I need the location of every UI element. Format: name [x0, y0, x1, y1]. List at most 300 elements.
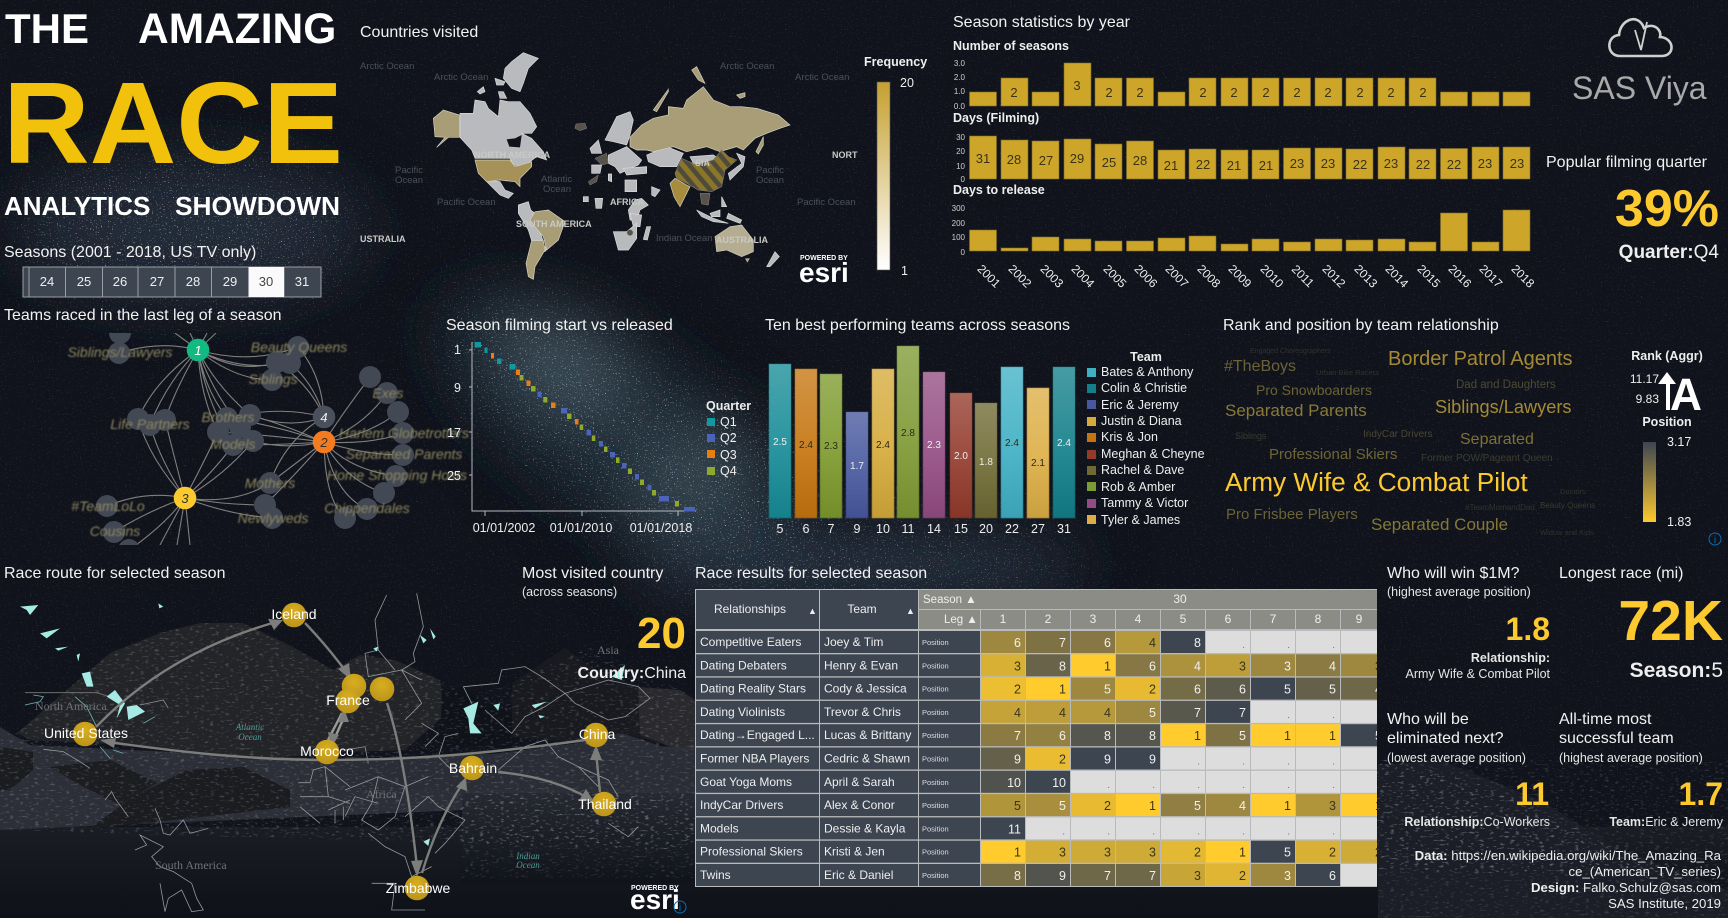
chart: days filming: 23 [1384, 156, 1398, 171]
legend: team: Bates & Anthony [1101, 365, 1194, 379]
world map: AFRICA [610, 197, 644, 207]
word cloud: relationships: Beauty Queens [1540, 501, 1595, 510]
row: Competitive Eaters: Competitive Eaters [700, 635, 801, 649]
network graph: 1 [194, 343, 202, 358]
world map: Atlantic [541, 174, 572, 185]
row: Goat Yoga Moms: . [1287, 780, 1290, 791]
row: Dating Engaged: Lucas & Brittany [824, 728, 911, 742]
chart: number of seasons: 2 [1293, 85, 1301, 100]
chart: number of seasons: 2 [1324, 85, 1332, 100]
row: Professional Skiers: Position [922, 848, 949, 857]
chart: number of seasons: 2 [1105, 85, 1113, 100]
legend: team: Rachel & Dave [1101, 463, 1184, 477]
chart: days to release: 2005 [1100, 262, 1129, 291]
table header: ▲ [906, 606, 915, 616]
icon: info: i [1714, 535, 1716, 546]
route map: Iceland [271, 606, 317, 622]
row: Competitive Eaters: . [1332, 640, 1335, 651]
row: Twins: Position [922, 871, 949, 880]
chart: days to release: 2007 [1162, 262, 1191, 291]
bar chart: ten best teams: 2.1 [1031, 458, 1045, 469]
chart: number of seasons: 2 [1230, 85, 1238, 100]
kpi: who will be eliminated: eliminated next? [1387, 730, 1504, 747]
row: Dating Engaged: 7 [1014, 729, 1021, 743]
row: Dating Violinists [696, 701, 1385, 723]
legend: frequency: 20 [900, 76, 914, 90]
route map: Zimbabwe [386, 880, 450, 896]
table header: Season ▲ [923, 594, 977, 606]
chart: days to release: 2016 [1445, 262, 1474, 291]
row: Dating Reality Stars: 6 [1194, 683, 1201, 697]
route map: Atlantic [235, 722, 264, 732]
legend: team: Colin & Christie [1101, 381, 1187, 395]
chart: days to release: 2009 [1225, 262, 1254, 291]
world map: Indian Ocean [656, 233, 713, 244]
row: Former NBA Players: 9 [1104, 752, 1111, 766]
legend: rank size: 9.83 [1636, 392, 1659, 406]
kpi: longest race: Longest race (mi) [1559, 565, 1684, 582]
word cloud: relationships: Doctors [1560, 487, 1586, 496]
row: Dating Reality Stars: 2 [1014, 683, 1021, 697]
word cloud: relationships: Pro Frisbee Players [1226, 506, 1358, 523]
row: Goat Yoga Moms: 10 [1052, 776, 1066, 790]
row: Professional Skiers: 3 [1059, 846, 1066, 860]
route map: Morocco [300, 743, 354, 759]
scatter: filming start vs released: 9 [454, 381, 461, 395]
world map: SIA [695, 158, 711, 168]
row: Former NBA Players: . [1287, 756, 1290, 768]
scatter: filming start vs released: 01/01/2002 [473, 521, 535, 535]
row: Professional Skiers: 3 [1149, 846, 1156, 860]
row: Dating Violinists: Trevor & Chris [824, 705, 901, 719]
bar chart: ten best teams: 2.4 [1057, 438, 1071, 449]
row: Former NBA Players: Cedric & Shawn [824, 752, 910, 766]
route map: Asia [597, 643, 620, 657]
kpi: who will be eliminated [1387, 711, 1550, 829]
scatter: filming start vs released: 01/01/2018 [630, 521, 692, 535]
bar chart: ten best teams: 6 [803, 522, 810, 536]
row: IndyCar Drivers: 5 [1059, 799, 1066, 813]
route map: Africa [366, 787, 397, 801]
chart: days to release: Days to release [953, 183, 1045, 197]
table header: 4 [1135, 612, 1142, 626]
network graph: Brothers [202, 409, 254, 425]
row: Dating Violinists: . [1332, 710, 1335, 721]
network graph: Home Shopping Hosts [327, 467, 467, 483]
kpi: most successful team [1559, 711, 1724, 829]
row: Dating Debaters: Henry & Evan [824, 658, 898, 672]
chart: days to release: 2011 [1289, 262, 1317, 290]
world map: Pacific Ocean [437, 197, 496, 208]
title: The Amazing [5, 5, 336, 53]
credits: SAS Institute, 2019 [1608, 896, 1721, 911]
credits: ce_(American_TV_series) [1569, 864, 1721, 879]
world map: Arctic Ocean [434, 72, 488, 83]
chart: days to release: 100 [952, 233, 966, 242]
row: Former NBA Players: 9 [1014, 752, 1021, 766]
row: Dating Debaters: 4 [1194, 659, 1201, 673]
row: Dating Engaged: 1 [1329, 729, 1336, 743]
row: Professional Skiers: 1 [1239, 846, 1246, 860]
row: Goat Yoga Moms: . [1107, 780, 1110, 791]
chart: days to release: 2001 [974, 262, 1003, 291]
season selector: 24 [40, 274, 54, 289]
chart: number of seasons: 2 [1136, 85, 1144, 100]
row: IndyCar Drivers: 2 [1104, 799, 1111, 813]
chart: days filming: 25 [1102, 155, 1116, 170]
row: Goat Yoga Moms: . [1197, 780, 1200, 791]
kpi: who will be eliminated: Who will be [1387, 711, 1469, 728]
row: Dating Reality Stars [696, 678, 1385, 700]
row: Dating Debaters: Dating Debaters [700, 658, 787, 672]
network graph: 3 [181, 491, 189, 506]
legend: quarter: Q2 [720, 431, 737, 445]
bar chart: ten best teams: 14 [927, 522, 941, 536]
row: Goat Yoga Moms: Goat Yoga Moms [700, 775, 792, 789]
logo: SAS Viya [1572, 19, 1707, 106]
row: Former NBA Players: . [1332, 756, 1335, 768]
chart: number of seasons: 2 [1262, 85, 1270, 100]
row: Twins: Twins [700, 868, 731, 882]
network graph: Separated Parents [346, 446, 462, 462]
chart: days to release: 2008 [1194, 262, 1223, 291]
word cloud: relationships: Professional Skiers [1269, 446, 1397, 463]
row: Dating Reality Stars: 2 [1149, 683, 1156, 697]
chart: number of seasons: 2 [1356, 85, 1364, 100]
bar chart: ten best teams: 15 [954, 522, 968, 536]
row: Professional Skiers: 5 [1284, 846, 1291, 860]
chart: days filming: 23 [1290, 156, 1304, 171]
kpi: most successful team: All-time most [1559, 711, 1652, 728]
table header: 5 [1180, 612, 1187, 626]
heading: filming start vs released: Season filming start vs released [446, 317, 673, 334]
word cloud: relationships [1224, 348, 1595, 537]
heading: teams raced: Teams raced in the last leg of a season [4, 307, 282, 324]
row: Goat Yoga Moms: Position [922, 778, 949, 787]
row: Models: 11 [1008, 822, 1021, 836]
network graph: Cousins [90, 523, 140, 539]
row: Twins: 9 [1059, 869, 1066, 883]
chart: days to release: 300 [952, 204, 966, 213]
legend: team: Eric & Jeremy [1101, 398, 1180, 412]
legend: team [1087, 350, 1205, 527]
kpi: most visited country: (across seasons) [522, 585, 617, 599]
row: Models: . [1332, 826, 1335, 837]
legend: quarter [706, 399, 751, 478]
legend: team: Rob & Amber [1101, 480, 1175, 494]
bar chart: ten best teams: 9 [854, 522, 861, 536]
world map: Ocean [395, 175, 423, 186]
row: Former NBA Players: . [1242, 756, 1245, 768]
table header: 9 [1356, 612, 1363, 626]
row: Twins: 7 [1149, 869, 1156, 883]
table header: 1 [1000, 612, 1007, 626]
chart: number of seasons: 3 [1073, 78, 1081, 93]
row: Dating Violinists: 7 [1194, 706, 1201, 720]
legend: team: Tammy & Victor [1101, 496, 1188, 510]
legend: frequency [864, 55, 927, 278]
chart: number of seasons: 0.0 [954, 102, 966, 111]
bar chart: ten best teams: 2.3 [927, 440, 941, 451]
chart: days filming: 23 [1478, 156, 1492, 171]
row: IndyCar Drivers: Alex & Conor [824, 798, 895, 812]
chart: days to release: 2006 [1131, 262, 1160, 291]
row: Dating Engaged: 8 [1104, 729, 1111, 743]
network graph: Mothers [245, 475, 295, 491]
row: Dating Engaged: 8 [1149, 729, 1156, 743]
row: Dating Debaters: 3 [1375, 659, 1382, 673]
word cloud: relationships: Army Wife & Combat Pilot [1225, 467, 1528, 497]
route map [20, 593, 650, 912]
kpi: who will be eliminated: (lowest average position) [1387, 751, 1526, 765]
row: Goat Yoga Moms: . [1332, 780, 1335, 791]
row: Dating Violinists: 7 [1239, 706, 1246, 720]
legend: rank size: 11.17 [1630, 372, 1659, 386]
row: Dating Reality Stars: 6 [1239, 683, 1246, 697]
bar chart: ten best teams [769, 346, 1075, 536]
table header: 2 [1045, 612, 1052, 626]
row: Competitive Eaters: 6 [1014, 636, 1021, 650]
chart: days filming: 0 [961, 175, 966, 184]
chart: days filming: 21 [1227, 158, 1241, 173]
kpi: popular filming quarter [1546, 154, 1719, 263]
row: Goat Yoga Moms: 10 [1007, 776, 1021, 790]
chart: days to release: 2015 [1414, 262, 1443, 291]
word cloud: relationships: #TeamMomandDad [1465, 503, 1535, 512]
row: Twins: 3 [1284, 869, 1291, 883]
chart: days filming: 30 [956, 133, 966, 142]
bar chart: ten best teams: 2.8 [901, 428, 915, 439]
row: Former NBA Players: 2 [1059, 752, 1066, 766]
network graph: 4 [320, 410, 328, 425]
icon: info route map: i [679, 903, 681, 914]
row: Dating Violinists: 4 [1104, 706, 1111, 720]
bar chart: ten best teams: 2.3 [824, 441, 838, 452]
chart: days filming: 28 [1007, 152, 1021, 167]
chart: days to release: 2012 [1319, 262, 1348, 291]
world map: SOUTH AMERICA [516, 219, 592, 229]
chart: number of seasons [953, 39, 1530, 111]
legend: quarter: Q1 [720, 415, 737, 429]
row: Twins: 8 [1014, 869, 1021, 883]
title: Race: RACE [3, 58, 343, 188]
season selector: 29 [223, 274, 237, 289]
legend: position: 1.83 [1667, 515, 1691, 529]
row: Dating Violinists: Position [922, 708, 949, 717]
chart: days filming [953, 111, 1530, 184]
row: Competitive Eaters: 6 [1104, 636, 1111, 650]
icon: info [1709, 533, 1721, 546]
row: Goat Yoga Moms: April & Sarah [824, 775, 895, 789]
kpi: who will be eliminated: 11 [1515, 776, 1549, 812]
kpi: popular filming quarter: Quarter:Q4 [1619, 242, 1719, 263]
kpi: most visited country: 20 [637, 609, 686, 658]
row: Models: Dessie & Kayla [824, 821, 906, 835]
row: Professional Skiers: Kristi & Jen [824, 845, 885, 859]
logo: esri (world map): esri [799, 257, 849, 288]
chart: number of seasons: 2 [1387, 85, 1395, 100]
legend: rank size: A [1670, 369, 1702, 420]
chart: days filming: 22 [1416, 157, 1430, 172]
row: Goat Yoga Moms: . [1242, 780, 1245, 791]
row: IndyCar Drivers: 3 [1329, 799, 1336, 813]
chart: days to release: 2003 [1037, 262, 1066, 291]
row: Dating Reality Stars: Dating Reality Stars [700, 682, 806, 696]
chart: days to release: 2014 [1382, 262, 1411, 291]
world map: Arctic Ocean [720, 61, 774, 72]
row: Professional Skiers: 1 [1014, 846, 1021, 860]
row: Dating Violinists: . [1287, 710, 1290, 721]
row: IndyCar Drivers: IndyCar Drivers [700, 798, 783, 812]
row: Former NBA Players: . [1197, 756, 1200, 768]
row: Competitive Eaters: 8 [1194, 636, 1201, 650]
word cloud: relationships: Border Patrol Agents [1388, 348, 1573, 370]
legend: quarter: Q4 [720, 464, 737, 478]
word cloud: relationships: Siblings/Lawyers [1435, 397, 1571, 417]
network graph: Models [210, 436, 256, 452]
world map: Ocean [756, 175, 784, 186]
row: Dating Reality Stars: 5 [1284, 683, 1291, 697]
logo: esri (world map): POWERED BY [800, 255, 848, 262]
row: Dating Debaters: 6 [1149, 659, 1156, 673]
chart: number of seasons: 3.0 [954, 59, 966, 68]
word cloud: relationships: Former POW/Pageant Queen [1421, 453, 1553, 464]
kpi: who will win: 1.8 [1506, 611, 1550, 647]
table header: 30 [1173, 592, 1187, 606]
row: Dating Violinists: Dating Violinists [700, 705, 785, 719]
world map: Pacific [395, 165, 423, 176]
bar chart: ten best teams: 5 [777, 522, 784, 536]
row: Models: . [1107, 826, 1110, 837]
bar chart: ten best teams: 1.8 [979, 457, 993, 468]
row: IndyCar Drivers: Position [922, 801, 949, 810]
bar chart: ten best teams: 22 [1005, 522, 1019, 536]
word cloud: relationships: Urban Bike Racers [1316, 368, 1379, 377]
row: Models: . [1197, 826, 1200, 837]
background: mountains [0, 623, 1728, 918]
route map: United States [44, 725, 128, 741]
kpi: longest race: Season:5 [1630, 659, 1723, 682]
row: Professional Skiers: 2 [1375, 846, 1382, 860]
row: Competitive Eaters: Joey & Tim [824, 635, 883, 649]
legend: position [1642, 415, 1692, 529]
season selector [23, 267, 321, 297]
chart: number of seasons: 1.0 [954, 87, 966, 96]
world map: NORT [832, 150, 858, 160]
route map: Thailand [578, 796, 632, 812]
world map: Pacific Ocean [797, 197, 856, 208]
bar chart: ten best teams: 2.0 [954, 451, 968, 462]
row: IndyCar Drivers [696, 794, 1385, 816]
row: IndyCar Drivers: 1 [1149, 799, 1156, 813]
legend: rank size [1630, 349, 1703, 420]
chart: days filming: 29 [1070, 151, 1084, 166]
world map: USTRALIA [360, 234, 406, 244]
row: Dating Engaged [696, 724, 1385, 746]
route map: North America [35, 699, 107, 713]
route map: France [326, 692, 370, 708]
chart: days to release: 2013 [1351, 262, 1380, 291]
bar chart: ten best teams: 10 [876, 522, 890, 536]
season selector: 26 [113, 274, 127, 289]
row: Former NBA Players [696, 748, 1385, 770]
legend: team: Kris & Jon [1101, 430, 1158, 444]
row: Professional Skiers: 3 [1104, 846, 1111, 860]
legend: team: Tyler & James [1101, 513, 1180, 527]
row: IndyCar Drivers: 5 [1194, 799, 1201, 813]
row: Dating Reality Stars: 4 [1375, 683, 1382, 697]
chart: days filming: 28 [1133, 153, 1147, 168]
row: IndyCar Drivers: 1 [1375, 799, 1382, 813]
word cloud: relationships: Pro Snowboarders [1256, 382, 1372, 398]
chart: days filming: 22 [1447, 157, 1461, 172]
bar chart: ten best teams: 31 [1057, 522, 1071, 536]
network graph: Chippendales [324, 500, 410, 516]
chart: number of seasons: 2 [1199, 85, 1207, 100]
legend: position: Position [1642, 415, 1692, 429]
subtitle: Analytics Showdown: ANALYTICS [4, 191, 150, 221]
heading: race results: Race results for selected season [695, 565, 927, 582]
legend: team: Team [1130, 350, 1162, 364]
row: Models: Position [922, 824, 949, 833]
route map: Ocean [238, 732, 262, 742]
network graph [68, 333, 469, 545]
bar chart: ten best teams: 2.4 [799, 440, 813, 451]
chart: days filming: 23 [1510, 156, 1524, 171]
route map: Ocean [516, 860, 540, 870]
row: Dating Engaged: Dating→Engaged L... [700, 728, 815, 742]
network graph: Harlem Globetrotters [339, 425, 469, 441]
season selector: 27 [150, 274, 164, 289]
world map: AUSTRALIA [716, 235, 768, 245]
row: Models: . [1152, 826, 1155, 837]
bar chart: ten best teams: 2.4 [876, 440, 890, 451]
route map: Bahrain [449, 760, 497, 776]
row: Twins: 6 [1329, 869, 1336, 883]
kpi: who will win: (highest average position) [1387, 585, 1531, 599]
title: The Amazing: AMAZING [138, 6, 336, 53]
chart: days filming: 20 [956, 147, 966, 156]
row: Dating Engaged: 5 [1375, 729, 1382, 743]
legend: frequency: Frequency [864, 55, 927, 69]
table header: Relationships [714, 602, 786, 616]
chart: days filming: 31 [976, 151, 990, 166]
network graph: Beauty Queens [251, 339, 347, 355]
chart: days filming: 27 [1039, 153, 1053, 168]
row: Dating Violinists: 4 [1059, 706, 1066, 720]
legend: team: Justin & Diana [1101, 414, 1182, 428]
row: Dating Engaged: 6 [1059, 729, 1066, 743]
scatter: filming start vs released: 25 [447, 469, 461, 483]
row: Twins: Eric & Daniel [824, 868, 893, 882]
row: Models [696, 817, 1385, 839]
kpi: most visited country: Most visited country [522, 565, 663, 582]
row: Competitive Eaters: 7 [1059, 636, 1066, 650]
bar chart: ten best teams: 11 [902, 522, 915, 536]
row: Dating Engaged: 5 [1239, 729, 1246, 743]
row: Goat Yoga Moms [696, 771, 1385, 793]
legend: position: 3.17 [1667, 435, 1691, 449]
bar chart: ten best teams: 2.4 [1005, 438, 1019, 449]
row: Dating Reality Stars: 5 [1104, 683, 1111, 697]
world map: Ocean [543, 184, 571, 195]
logo: esri (route map): POWERED BY [631, 885, 679, 892]
chart: days to release: 2017 [1476, 262, 1505, 291]
kpi: popular filming quarter: 39% [1615, 180, 1719, 238]
legend: quarter: Quarter [706, 399, 751, 413]
row: Professional Skiers: 2 [1194, 846, 1201, 860]
row: Dating Debaters: 4 [1329, 659, 1336, 673]
